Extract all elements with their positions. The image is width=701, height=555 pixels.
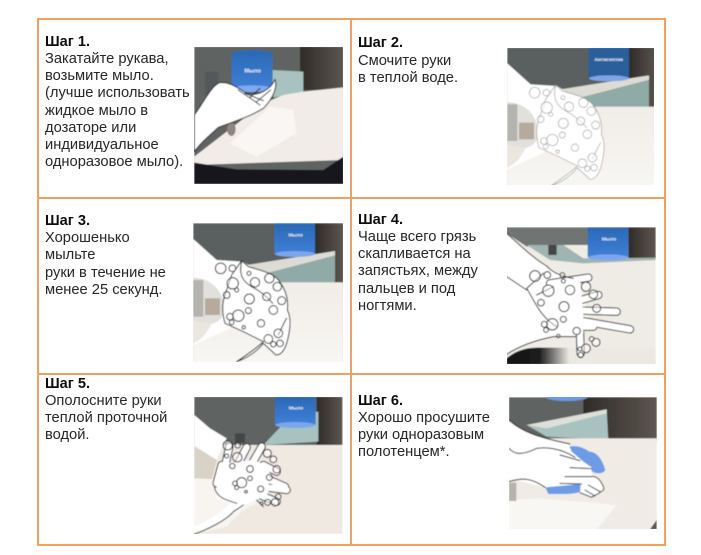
text: step 3 instructions: руки в течение не [45,265,166,281]
icon: soap dispenser [232,50,273,92]
panel: step 3 [38,198,351,374]
illustration: rinsing hands [194,397,342,534]
icon: dispenser: Мыло [602,236,616,242]
panel: step 5 [38,374,351,545]
panel: step 4 [351,198,665,374]
icon: dispenser [588,48,629,81]
icon: dispenser: Мыло [289,405,303,411]
illustration: soaping hands [193,223,343,362]
text: step 3 instructions: мыльте [45,247,95,263]
icon: arms drying [509,420,604,497]
icon: soap dispenser: Мыло [244,69,261,75]
text: step 5 instructions: теплой проточной [45,410,167,426]
heading: step 6: Шаг 6. [358,393,403,409]
text: step 1 instructions: одноразовое мыло). [45,154,183,170]
text: step 2 instructions: в теплой воде. [358,70,458,86]
illustration: drying hands with towel [509,394,657,529]
icon: hand [194,79,276,152]
illustration: hand under soap dispenser [194,47,343,184]
text: step 1 instructions: Закатайте рукава, [45,51,169,67]
text: step 4 instructions: пальцев и под [358,281,456,297]
heading: step 3: Шаг 3. [45,213,90,229]
text: step 4 instructions: скапливается на [358,246,472,262]
text: step 3 instructions: менее 25 секунд. [45,282,162,298]
text: step 6 instructions: руки одноразовым [358,427,484,443]
icon: dispenser [275,397,316,428]
icon: soapy hands [194,441,287,534]
heading: step 5: Шаг 5. [45,376,90,392]
icon: towel [545,446,605,494]
heading: step 2: Шаг 2. [358,35,403,51]
text: step 1 instructions: дозаторе или [45,120,136,136]
panel: step 6 [351,374,665,545]
heading: step 4: Шаг 4. [358,212,403,228]
illustration: washing between fingers [507,227,656,364]
icon: dispenser: Мыло [288,233,303,239]
heading: step 1: Шаг 1. [45,34,90,50]
text: step 4 instructions: ногтями. [358,298,417,314]
text: step 4 instructions: Чаще всего грязь [358,229,477,245]
text: step 6 instructions: полотенцем*. [358,444,450,460]
text: step 2 instructions: Смочите руки [358,53,451,69]
text: step 1 instructions: жидкое мыло в [45,103,148,119]
text: step 5 instructions: Ополосните руки [45,393,162,409]
icon: dispenser: Антисептик [594,57,624,63]
icon: dispenser [274,223,315,257]
text: step 6 instructions: Хорошо просушите [358,410,490,426]
illustration: wetting hands [507,48,657,187]
icon: dispenser [588,227,628,260]
panel: step 1 [38,19,351,198]
text: step 5 instructions: водой. [45,427,90,443]
text: step 1 instructions: возьмите мыло. [45,68,154,84]
text: step 4 instructions: запястьях, между [358,263,478,279]
icon: soapy interlaced hands [507,233,630,358]
text: step 1 instructions: индивидуальное [45,137,159,153]
icon: soapy hands [529,85,604,186]
panel: step 2 [351,19,665,198]
text: step 3 instructions: Хорошенько [45,230,130,246]
text: step 1 instructions: (лучше использовать [45,85,190,101]
icon: soapy hands [215,261,290,362]
